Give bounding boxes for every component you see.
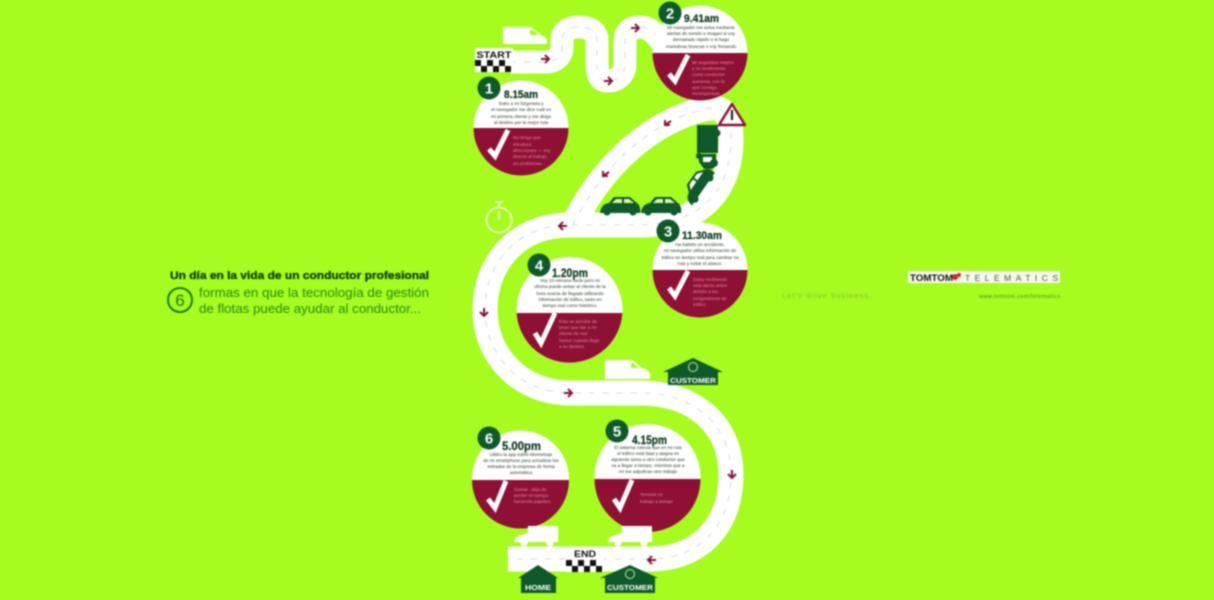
car one: [600, 197, 640, 216]
badge: 2: 2: [666, 6, 674, 22]
benefit text: y mi rendimiento: [692, 66, 726, 71]
van: customer stop: [605, 360, 650, 379]
benefit text: Esto se percibe de: [559, 319, 597, 324]
benefit text: tener que dar a mi: [559, 325, 596, 330]
step description: mi primera cliente y me dirige: [491, 114, 551, 119]
badge: 6: 6: [485, 430, 493, 448]
step description: ruta y evitar el atasco.: [678, 261, 722, 266]
time: 4.15pm: 4.15pm: [632, 433, 667, 447]
step description: información de tráfico, tanto en: [538, 297, 602, 302]
step description: mí me adjudican otro trabajo: [619, 469, 678, 474]
benefit text: como conductor: [692, 72, 725, 77]
step description: alertas de sonido e imagen si voy: [667, 31, 736, 36]
brand block: [782, 271, 1060, 300]
benefit text: introducir: [513, 142, 532, 147]
icon: number six: 6: [175, 291, 185, 310]
step description: demasiado rápido o si hago: [673, 37, 730, 42]
tagline: Let's drive business: [782, 293, 868, 300]
benefit text: Terminé mi: [640, 492, 662, 497]
step description: Voy 10 minutos tarde pero mi: [540, 278, 600, 283]
panel: step 2: [652, 2, 748, 100]
icon: truck: [696, 125, 720, 169]
step description: retiradas de la empresa de forma: [487, 464, 555, 469]
van: start: [503, 27, 547, 44]
badge: 4: 4: [535, 258, 544, 274]
icon: stopwatch: [486, 202, 512, 232]
icon: check: [489, 130, 508, 156]
time: 8.15am: 8.15am: [504, 89, 538, 101]
step description: El sistema calcula que en mi ruta: [614, 445, 682, 450]
step description: va a llegar a tiempo, mientras que a: [611, 463, 685, 468]
icon: check: [614, 480, 632, 508]
website: www.tomtom.com/telematics: [978, 294, 1060, 300]
step description: tiempo real como histórico.: [543, 303, 597, 308]
icon: check: [488, 481, 506, 508]
step description: al destino por la mejor ruta: [494, 120, 549, 125]
icon: home house: [518, 565, 558, 593]
step description: siguiente tarea a otro conductor que: [611, 457, 685, 462]
step description: de mi smartphone para actualizar los: [483, 458, 559, 463]
benefit text: haciendo papeleo: [514, 499, 551, 504]
start flag: [475, 48, 513, 72]
benefit text: humor cuando llego: [559, 338, 600, 343]
time: 11.30am: 11.30am: [682, 230, 722, 242]
logo: TomTom Telematics: TELEMATICS: [965, 273, 1058, 283]
panel: step 6: [472, 426, 569, 528]
time: 5.00pm: 5.00pm: [502, 439, 541, 453]
panel: step 4: [516, 254, 622, 363]
icon: final customer house: [600, 565, 658, 593]
time: 9.41am: 9.41am: [684, 13, 719, 25]
end flag: END: [574, 549, 597, 559]
benefit text: trabajo a tiempo: [640, 499, 673, 504]
start flag: START: [476, 50, 512, 61]
step description: maniobras bruscas o voy frenando: [666, 44, 737, 49]
step description: automática: [510, 470, 533, 475]
benefit text: recompensas: [692, 91, 720, 96]
step description: tráfico en tiempo real para cambiar mi: [661, 255, 739, 260]
badge: 1: 1: [485, 80, 493, 98]
benefit text: Mi seguridad mejora: [692, 60, 734, 65]
car three: [679, 163, 717, 207]
icon: customer house: CUSTOMER: [670, 376, 717, 385]
benefit text: tráfico.: [693, 302, 707, 307]
title: Un día en la vida de un conductor profesional: [170, 270, 429, 282]
heading block: [168, 270, 429, 316]
road: [485, 27, 731, 559]
icon: check: [669, 55, 688, 81]
icon: check: [669, 271, 688, 296]
benefit text: cliente de mal: [559, 331, 587, 336]
icon: number six: [168, 288, 192, 312]
benefit text: aumenta, con lo: [692, 79, 725, 84]
end flag: [566, 548, 604, 572]
step description: Ha habido un accidente,: [675, 242, 725, 247]
icon: crashed cars: [600, 163, 717, 216]
benefit text: congestiones de: [693, 296, 727, 301]
subtitle: de flotas puede ayudar al conductor...: [199, 302, 421, 316]
icon: home house: HOME: [525, 583, 551, 592]
step description: oficina puede avisar al cliente de la: [534, 284, 606, 289]
subtitle: formas en que la tecnología de gestión: [199, 286, 429, 300]
benefit text: Estoy recibiendo: [693, 277, 727, 282]
benefit text: Genial - dejo de: [514, 487, 547, 492]
benefit text: direcciones — voy: [513, 148, 551, 153]
benefit text: No tengo que: [513, 135, 541, 140]
logo: TomTom Telematics: TOMTOM: [910, 273, 953, 284]
icon: check: [535, 313, 555, 343]
time: 1.20pm: 1.20pm: [552, 266, 588, 280]
road arrows: [480, 24, 736, 564]
icon: warning triangle: [719, 104, 745, 125]
step description: hora exacta de llegada utilizando: [536, 291, 604, 296]
car two: [641, 197, 681, 216]
step description: Mi navegador me avisa mediante: [667, 25, 735, 30]
benefit text: directo al trabajo: [513, 154, 547, 159]
step description: el tráfico está fatal y asigna mi: [617, 451, 679, 456]
step description: mi navegador utiliza información de: [664, 248, 737, 253]
step description: Utilizo la app sobre kilometraje: [490, 452, 553, 457]
step description: el navegador me dice cuál es: [491, 107, 552, 112]
benefit text: esta alerta antes: [693, 283, 728, 288]
van: home: [514, 526, 558, 546]
van: final customer: [608, 526, 652, 546]
benefit text: debido a las: [693, 289, 718, 294]
panel: step 3: [652, 220, 748, 318]
icon: customer house: [663, 358, 723, 385]
logo: TomTom Telematics: [908, 271, 1060, 284]
benefit text: sin problemas: [513, 161, 542, 166]
panel: step 5: [594, 420, 700, 532]
icon: final customer house: CUSTOMER: [607, 583, 654, 592]
benefit text: a su destino.: [559, 344, 585, 349]
benefit text: perder mi tiempo: [514, 493, 549, 498]
badge: 3: 3: [664, 224, 672, 240]
benefit text: que consigo: [692, 85, 717, 90]
step description: Subo a mi furgoneta y: [499, 101, 544, 106]
badge: 5: 5: [613, 424, 621, 440]
panel: step 1: [474, 76, 568, 176]
